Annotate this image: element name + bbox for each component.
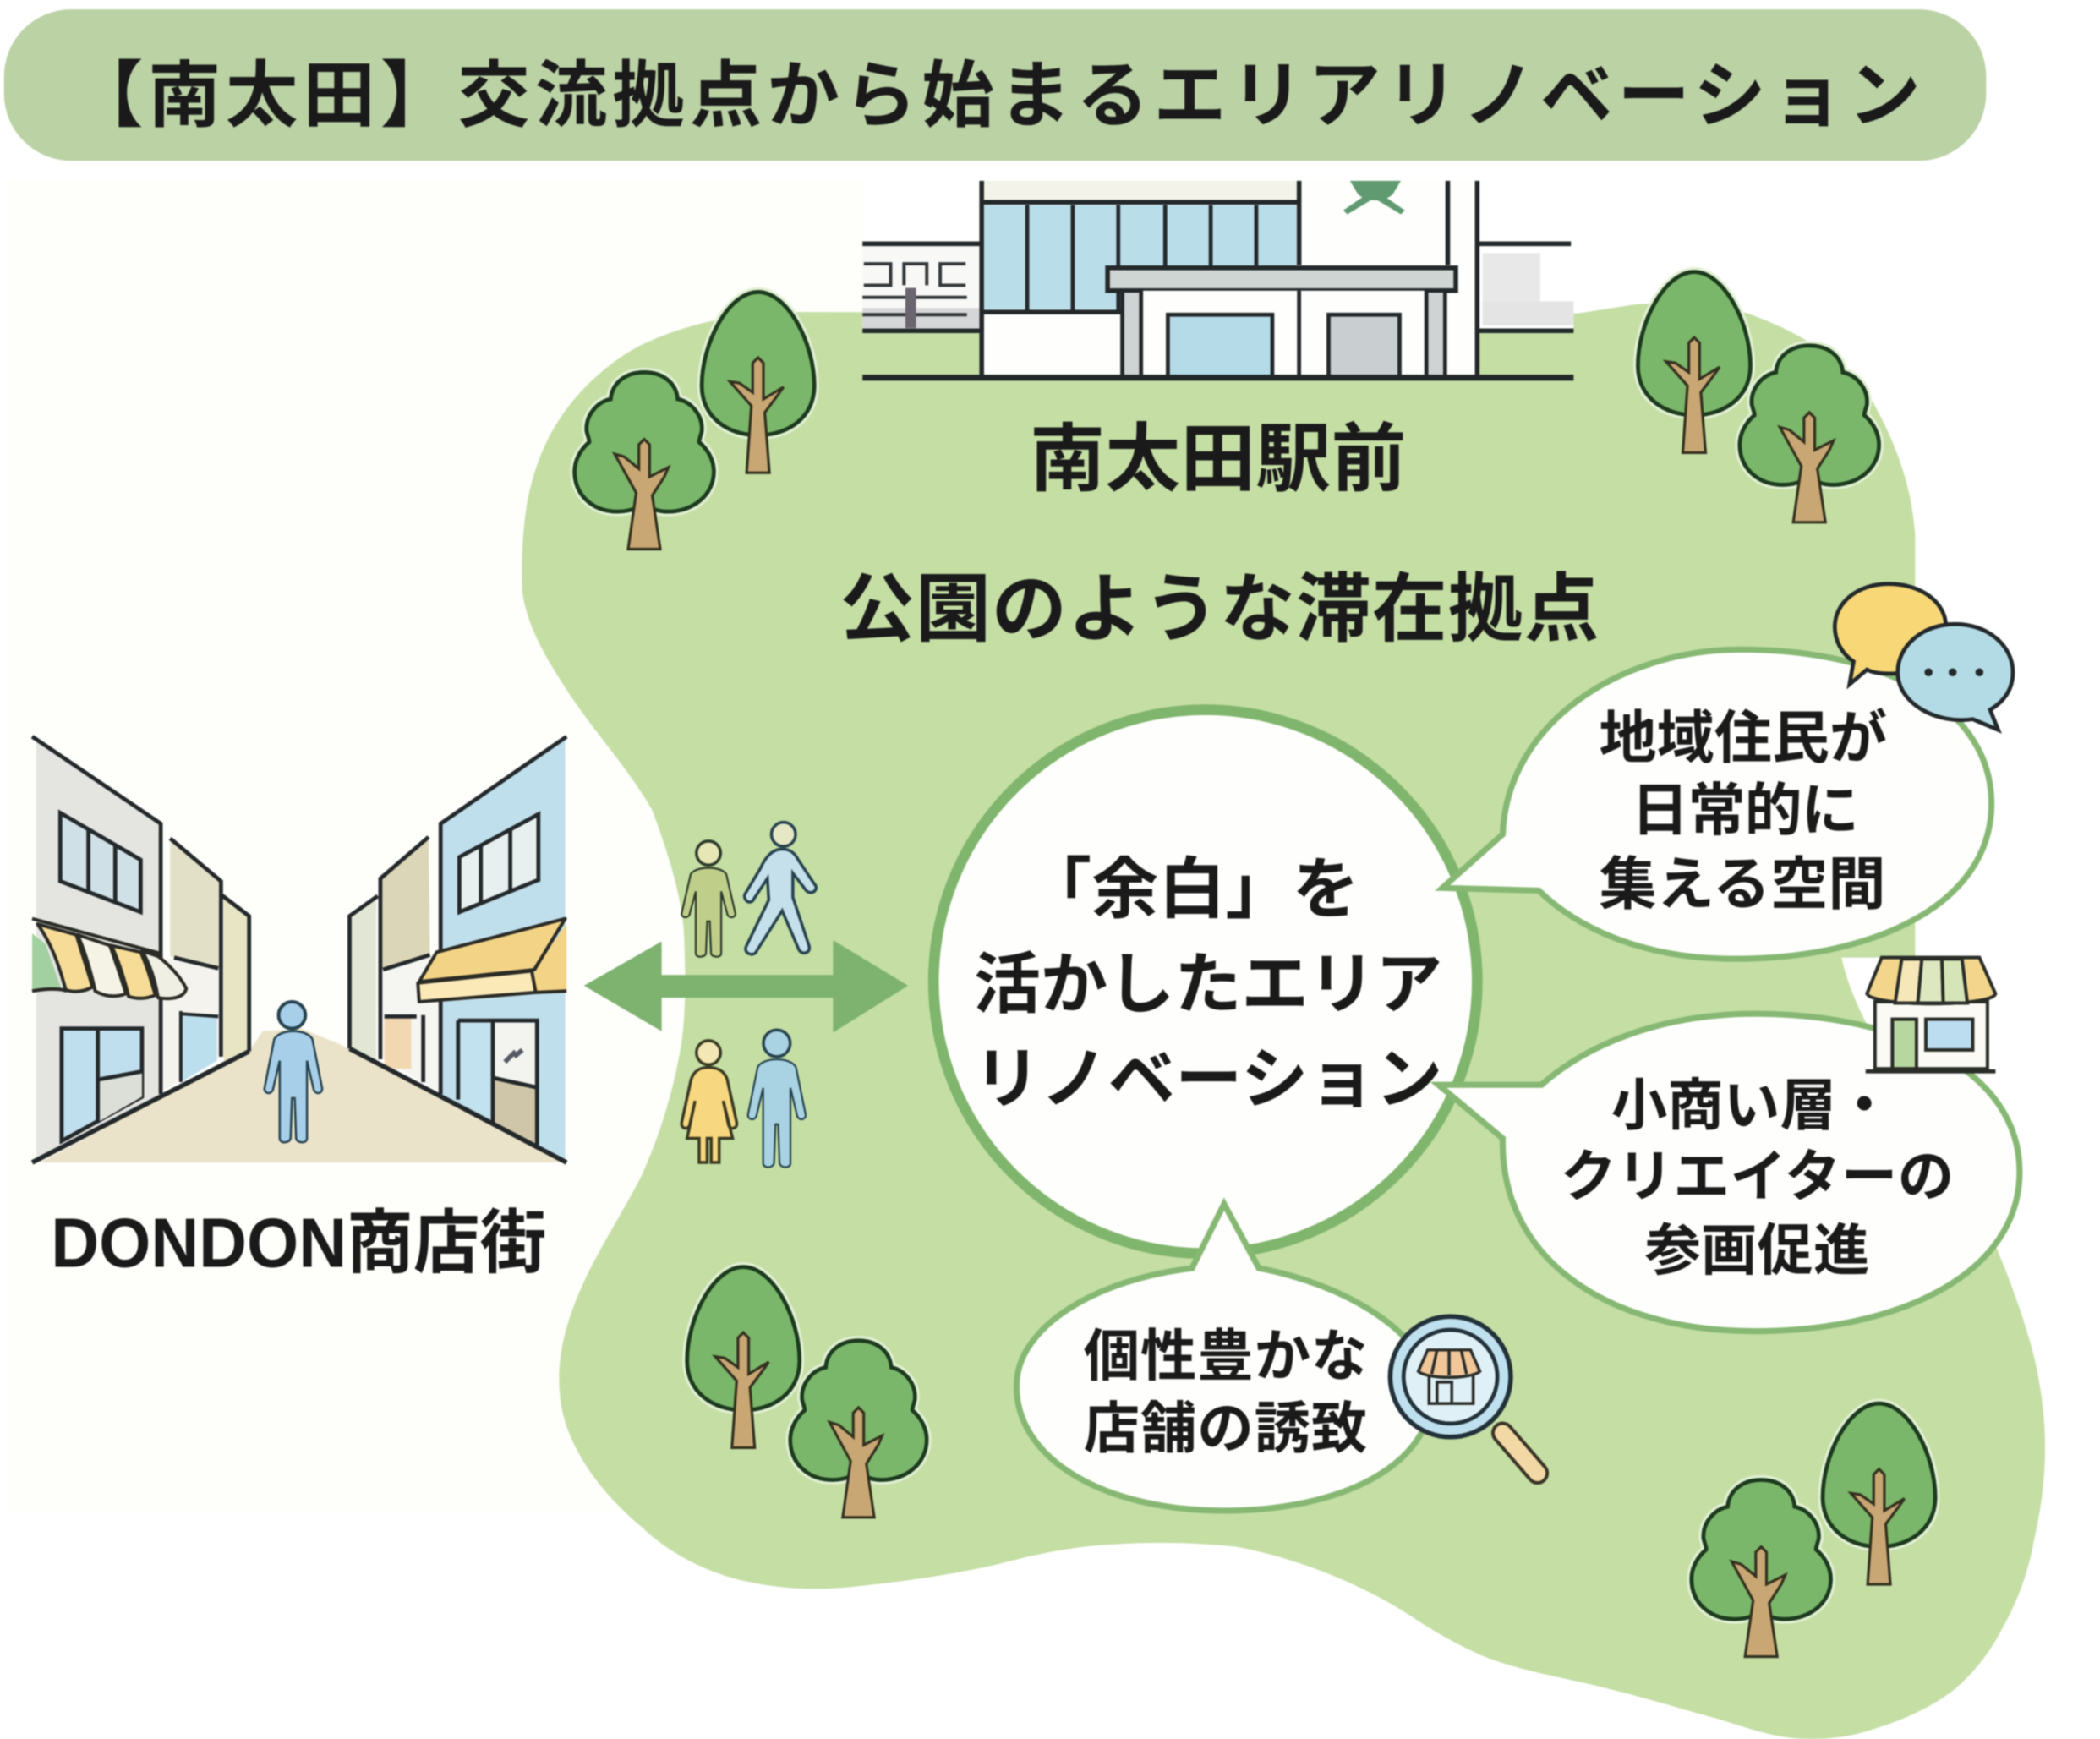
lens <box>1390 1316 1511 1437</box>
person green <box>681 841 736 957</box>
label: station front: 南太田駅前 <box>1030 417 1406 500</box>
title banner <box>4 9 1986 161</box>
left upper window <box>60 813 140 912</box>
left lower window <box>62 1029 142 1141</box>
speech bubble: residents: 集える空間 <box>1599 852 1886 916</box>
right upper window <box>459 814 539 912</box>
speech bubble: residents <box>1442 649 1992 959</box>
tree pair top left <box>575 292 814 549</box>
right awning <box>418 919 566 1002</box>
left wing <box>862 243 982 331</box>
tree pair top right <box>1638 272 1879 522</box>
entrance door <box>1168 314 1272 378</box>
central circle: area renovation: 活かしたエリア <box>974 946 1442 1021</box>
tree pair bottom left <box>687 1267 927 1518</box>
shopping street illustration <box>32 736 566 1162</box>
label: park-like hub: 公園のような滞在拠点 <box>839 567 1599 651</box>
speech bubble: small business and creators: 参画促進 <box>1644 1220 1869 1282</box>
icon: shop <box>1866 958 1995 1071</box>
tree pair bottom right <box>1692 1403 1935 1657</box>
road <box>41 1029 562 1162</box>
shop in lens <box>1419 1350 1480 1403</box>
bubble text: 個性豊かな <box>1084 1326 1367 1388</box>
bubble shape <box>1438 1014 2020 1332</box>
speech bubble: attract unique stores: 店舗の誘致 <box>1084 1397 1367 1460</box>
bubble shape <box>1442 649 1992 959</box>
title text: 【南太田】交流拠点から始まるエリアリノベーション <box>71 57 1921 137</box>
glass window band <box>982 181 1447 312</box>
left awning <box>32 919 186 998</box>
label: DONDON shopping street: DONDON商店街 <box>51 1205 546 1282</box>
person on street <box>265 1002 322 1142</box>
handle <box>1502 1433 1538 1474</box>
side door <box>1329 314 1399 378</box>
speech bubble: residents: 日常的に <box>1632 779 1859 843</box>
speech bubble: attract unique stores <box>1016 1204 1431 1511</box>
person walking <box>745 823 816 954</box>
central circle: area renovation: リノベーション <box>974 1042 1442 1117</box>
icon: magnifier with shop <box>1390 1316 1538 1474</box>
speech bubble: small business and creators: クリエイターの <box>1561 1146 1954 1209</box>
icon: chat bubbles <box>1835 584 2013 730</box>
people group walking <box>681 823 816 1168</box>
main station block <box>982 181 1477 378</box>
station building illustration <box>862 181 1573 378</box>
right lower shopfront <box>458 1020 537 1145</box>
circle text: 「余白」を <box>1025 851 1359 927</box>
right wing <box>1477 243 1573 331</box>
title pill <box>4 9 1986 161</box>
bubble text: 小商い層・ <box>1611 1075 1892 1138</box>
bubble shape <box>1016 1204 1431 1511</box>
ground line <box>862 375 1573 380</box>
right buildings <box>349 736 566 1160</box>
central circle: area renovation <box>933 710 1477 1254</box>
person in dress <box>681 1041 736 1162</box>
roof emblem <box>1343 181 1405 214</box>
columns <box>1123 291 1445 378</box>
street edge lines <box>32 1048 566 1162</box>
green shop behind awning <box>32 933 62 990</box>
circle <box>933 710 1477 1254</box>
park area green blob <box>522 304 2045 1739</box>
illustration backdrop <box>7 181 864 1513</box>
person blue <box>748 1030 806 1168</box>
bubble text: 地域住民が <box>1599 707 1887 771</box>
left buildings <box>32 736 249 1160</box>
canopy <box>1107 268 1456 291</box>
small doorway <box>181 1011 218 1082</box>
double-headed arrow <box>584 940 908 1032</box>
speech bubble: small business and creators <box>1438 1014 2020 1332</box>
